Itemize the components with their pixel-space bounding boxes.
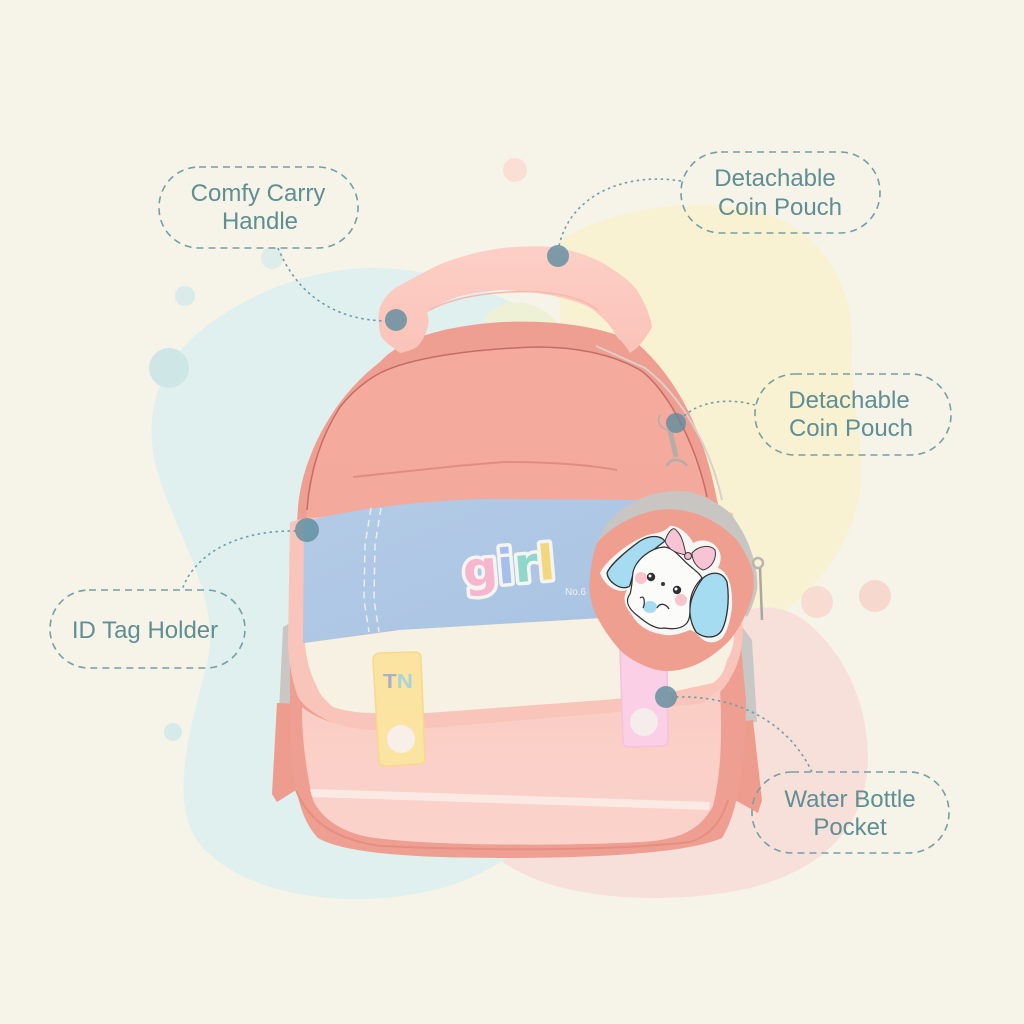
bag body: [290, 322, 746, 858]
blue flap panel: [303, 499, 640, 643]
callout: comfy carry handle: [159, 167, 407, 331]
lower pocket panel: [302, 688, 721, 845]
cream flap panel: [305, 610, 734, 713]
callout: detachable coin pouch right: [666, 374, 951, 455]
background blobs: [152, 205, 868, 899]
coin pouch: [589, 491, 763, 671]
sticker backing: [600, 526, 732, 642]
callout: detachable coin pouch top: Detachable: [714, 165, 836, 192]
zipper tape: [596, 346, 722, 500]
callout: comfy carry handle: Comfy Carry: [191, 180, 325, 207]
zipper pull: [753, 558, 763, 620]
pink tab: [620, 650, 668, 747]
callout: comfy carry handle: Handle: [222, 208, 298, 235]
girl logo: girl: [460, 535, 557, 599]
handle inner fold: [430, 292, 598, 310]
handle: [378, 246, 652, 353]
callout: water bottle pocket: Pocket: [813, 814, 887, 841]
yellow tab: [373, 652, 425, 766]
zipper seam: [307, 347, 707, 510]
callout: id tag holder: ID Tag Holder: [72, 617, 218, 644]
left ear: [607, 536, 665, 588]
callout: detachable coin pouch right: Detachable: [788, 387, 910, 414]
metal clip: [659, 415, 687, 466]
side straps: [272, 703, 762, 813]
bunny bow: [665, 529, 715, 570]
flap binding: [288, 500, 743, 730]
backpack illustration: [272, 246, 763, 858]
white stripe: [310, 789, 710, 810]
right ear: [690, 573, 728, 637]
side mesh pockets: [279, 622, 757, 724]
callout: detachable coin pouch top: [547, 152, 880, 267]
model number: No.6: [565, 587, 587, 598]
decorative circles: [149, 158, 891, 741]
bunny face: [628, 547, 702, 629]
callout: detachable coin pouch top: Coin Pouch: [718, 194, 842, 221]
top panel: [305, 347, 708, 540]
callout: water bottle pocket: Water Bottle: [784, 786, 916, 813]
yellow tab: TN: [383, 671, 413, 693]
callout: water bottle pocket: [655, 686, 949, 853]
pouch body: [589, 509, 754, 671]
callout: detachable coin pouch right: Coin Pouch: [789, 415, 913, 442]
bottom binding lines: [296, 790, 728, 849]
bunny features: [635, 572, 687, 613]
callout: id tag holder: [50, 518, 319, 668]
fold crease: [353, 462, 617, 477]
stitching: [364, 508, 381, 632]
pouch zipper band: [597, 491, 757, 617]
